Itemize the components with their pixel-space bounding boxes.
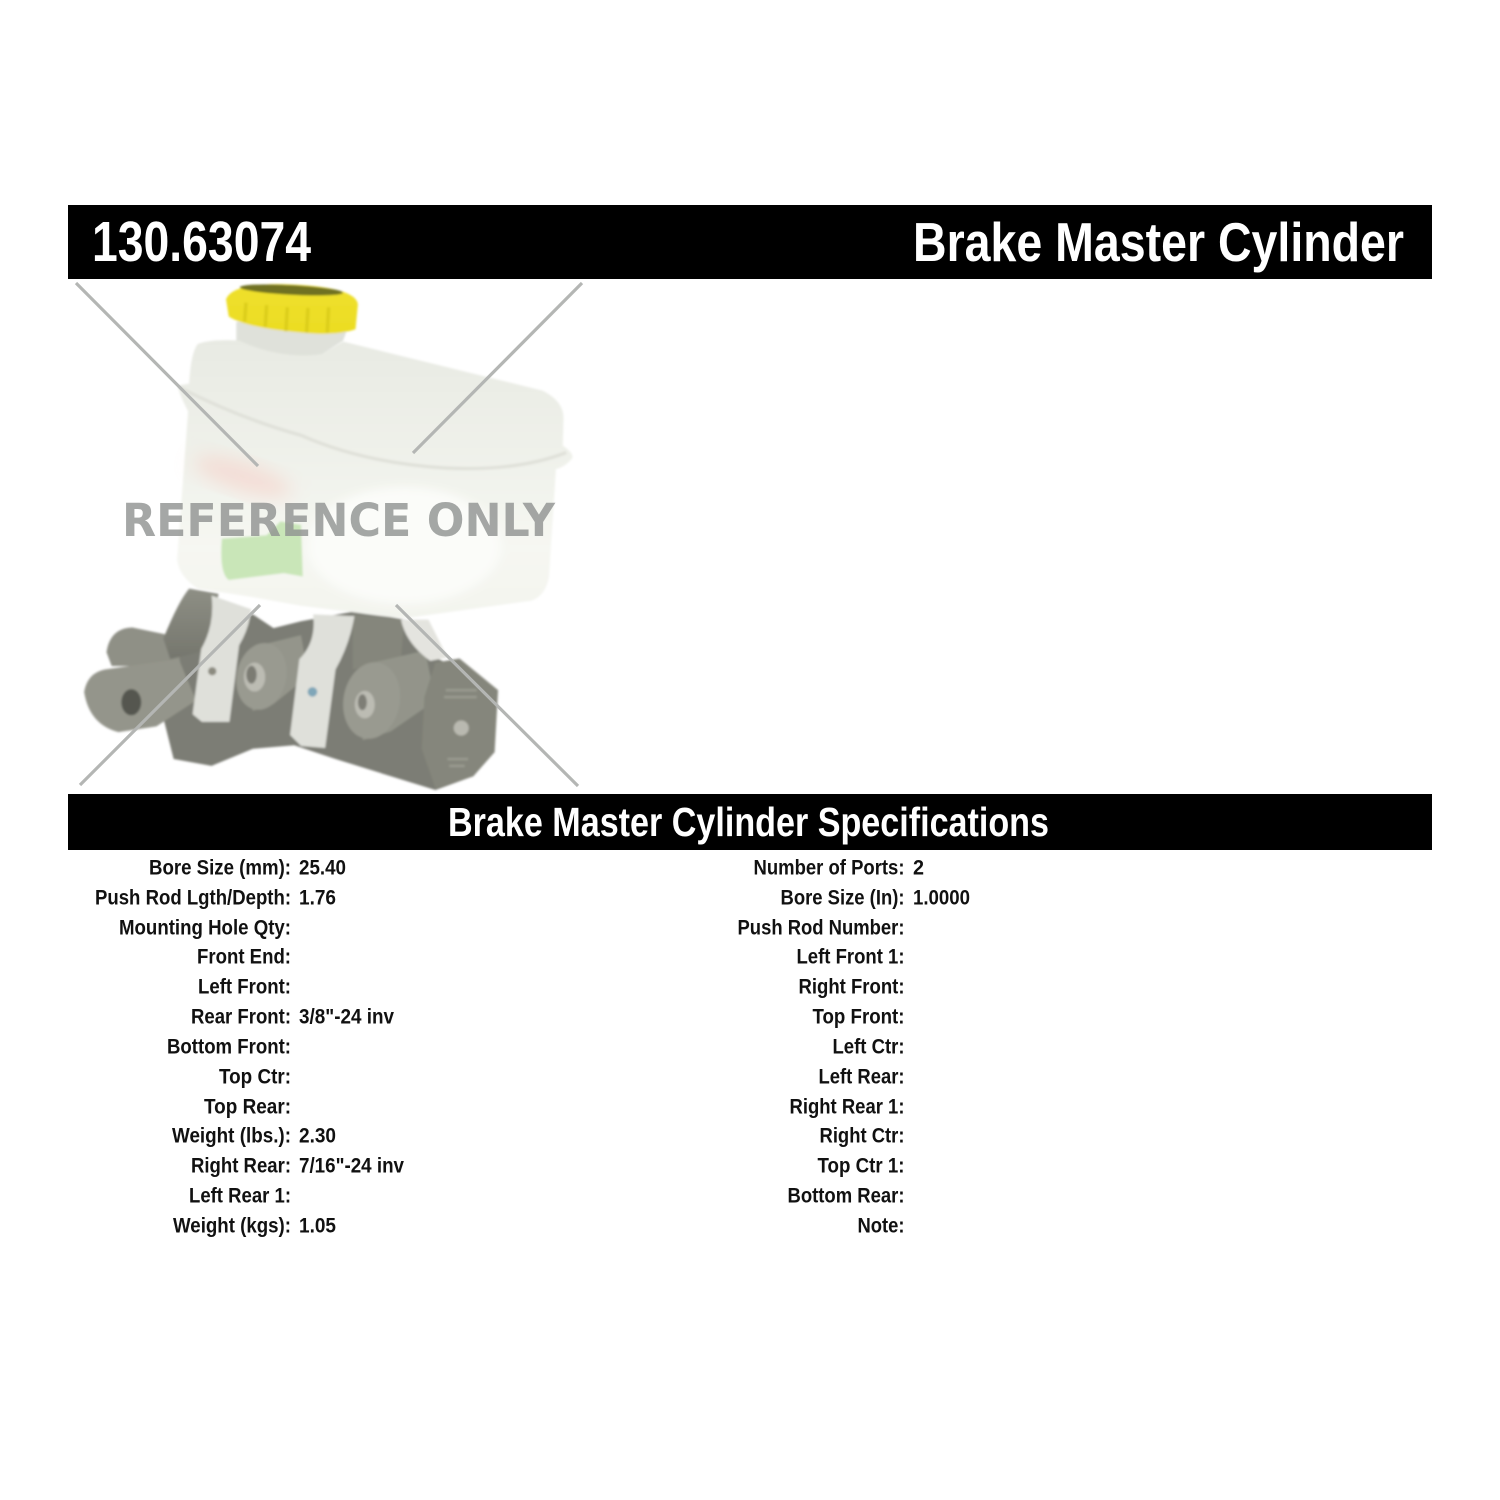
specifications: right column: Push Rod Number:: [738, 915, 904, 939]
specifications: left column: 1.05: [299, 1213, 336, 1237]
metal cylinder body: [84, 589, 497, 790]
specifications: left column: Top Rear:: [204, 1094, 291, 1118]
watermark cross lines: [76, 283, 582, 786]
product photo: brake master cylinder: [84, 282, 573, 790]
fluid reservoir: [177, 340, 573, 618]
specifications: left column: Rear Front:: [191, 1004, 291, 1028]
specifications: left column: 3/8"-24 inv: [299, 1004, 394, 1028]
watermark: reference only: REFERENCE ONLY: [122, 494, 556, 547]
specifications: right column: [738, 855, 970, 1237]
header bar: [68, 205, 1432, 279]
green sight window: [221, 521, 303, 580]
specifications: left column: 2.30: [299, 1123, 336, 1147]
specifications: right column: Top Ctr 1:: [818, 1153, 904, 1177]
specifications: left column: Left Rear 1:: [189, 1183, 291, 1207]
specifications: left column: Weight (lbs.):: [172, 1123, 291, 1147]
specifications: left column: Mounting Hole Qty:: [119, 915, 291, 939]
specifications: left column: Top Ctr:: [219, 1064, 291, 1088]
specifications: left column: Front End:: [197, 944, 291, 968]
specifications: right column: Left Front 1:: [796, 944, 904, 968]
specifications: left column: 7/16"-24 inv: [299, 1153, 404, 1177]
specifications: left column: Right Rear:: [191, 1153, 291, 1177]
yellow reservoir cap: [226, 282, 358, 334]
specifications: left column: 1.76: [299, 885, 336, 909]
specifications heading bar: Brake Master Cylinder Specifications: [448, 799, 1049, 845]
specifications heading bar: [68, 794, 1432, 850]
part number: 130.63074: [92, 210, 311, 274]
specifications: left column: Left Front:: [198, 974, 291, 998]
specifications: right column: Bore Size (In):: [780, 885, 904, 909]
specifications: right column: Left Rear:: [818, 1064, 904, 1088]
mounting brackets: [193, 595, 447, 748]
specifications: right column: Bottom Rear:: [788, 1183, 904, 1207]
specifications: right column: Right Ctr:: [820, 1123, 904, 1147]
specifications: left column: [95, 855, 404, 1237]
specifications: left column: 25.40: [299, 855, 346, 879]
specifications: right column: Note:: [858, 1213, 904, 1237]
specifications: right column: Top Front:: [812, 1004, 904, 1028]
end cap: [422, 658, 498, 788]
specifications: right column: 1.0000: [913, 885, 970, 909]
specifications: right column: 2: [913, 855, 924, 879]
specifications: left column: Weight (kgs):: [173, 1213, 291, 1237]
product title: Brake Master Cylinder: [913, 211, 1404, 273]
specifications: left column: Bore Size (mm):: [149, 855, 291, 879]
specifications: right column: Left Ctr:: [832, 1034, 904, 1058]
specifications: right column: Right Front:: [798, 974, 904, 998]
specifications: left column: Bottom Front:: [167, 1034, 291, 1058]
reservoir neck: [236, 322, 348, 356]
specifications: right column: Number of Ports:: [754, 855, 904, 879]
specifications: left column: Push Rod Lgth/Depth:: [95, 885, 291, 909]
specifications: right column: Right Rear 1:: [790, 1094, 904, 1118]
